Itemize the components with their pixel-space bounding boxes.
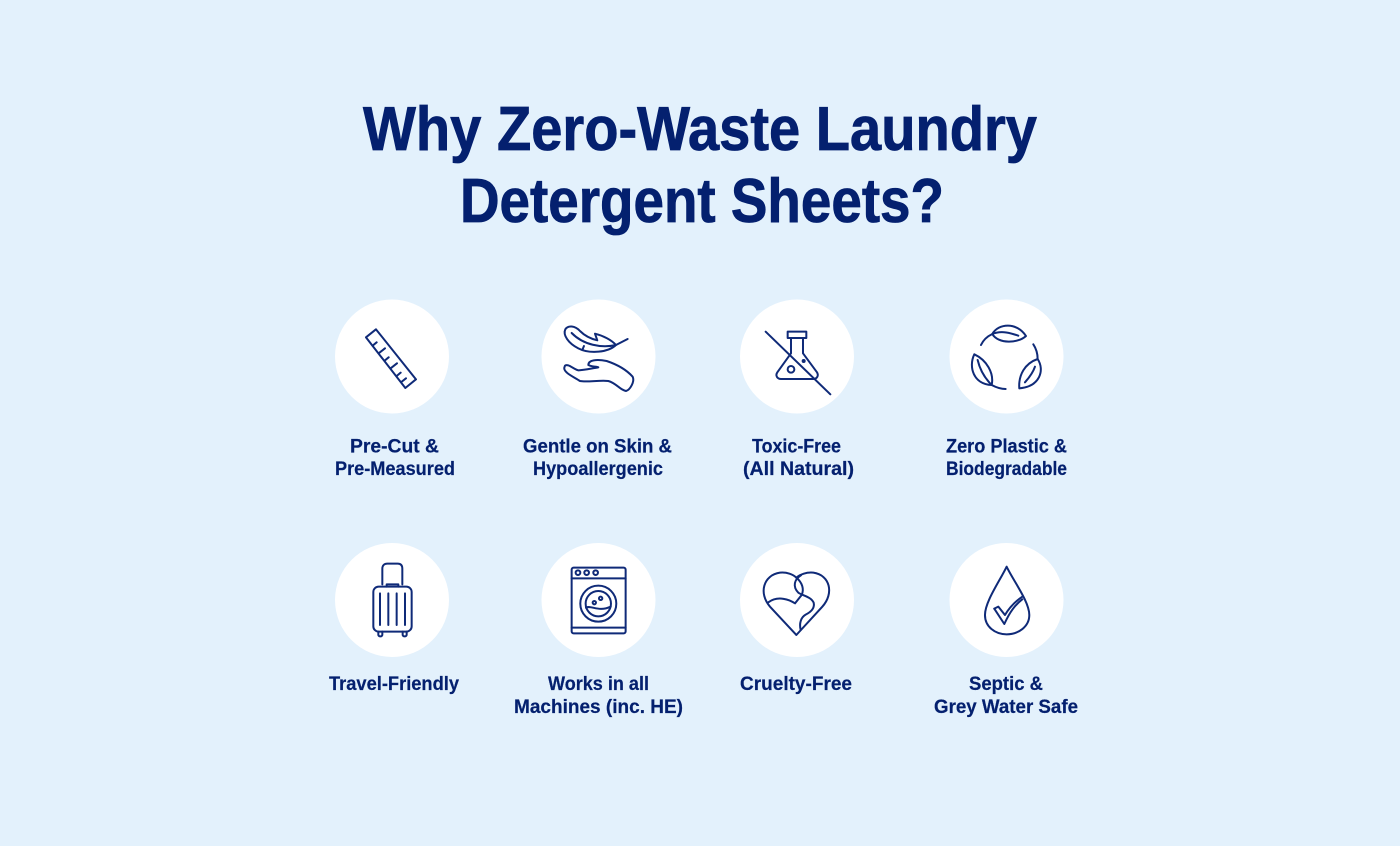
icon: suitcase — [373, 564, 412, 636]
item: toxic-free: (All Natural) — [743, 459, 854, 480]
icon: three leaves in a cycle — [972, 326, 1041, 389]
item: toxic-free — [740, 300, 854, 480]
item: septic and grey water safe — [934, 543, 1078, 718]
item: gentle on skin — [523, 300, 672, 480]
item: gentle on skin: Gentle on Skin & — [523, 436, 672, 458]
item: cruelty-free: Cruelty-Free — [740, 674, 852, 695]
item: pre-cut and pre-measured: Pre-Measured — [335, 459, 455, 480]
item: zero plastic: Zero Plastic & — [946, 436, 1067, 458]
item: pre-cut and pre-measured — [335, 300, 455, 480]
icon: heart globe — [764, 573, 829, 635]
item: travel-friendly: Travel-Friendly — [329, 674, 459, 695]
item: septic and grey water safe: Septic & — [969, 674, 1043, 695]
icon: crossed-out flask — [766, 332, 830, 394]
title: Why Zero-Waste Laundry — [363, 95, 1037, 164]
item: travel-friendly — [329, 543, 459, 695]
title: Detergent Sheets? — [460, 167, 944, 236]
title — [363, 95, 1037, 236]
item: septic and grey water safe: Grey Water Safe — [934, 697, 1078, 718]
icon: water drop with check — [985, 567, 1029, 634]
item: zero plastic — [946, 300, 1067, 480]
item: zero plastic: Biodegradable — [946, 459, 1067, 480]
item: works in all machines: Works in all — [548, 674, 649, 695]
item: gentle on skin: Hypoallergenic — [533, 459, 663, 480]
item: works in all machines — [514, 543, 683, 718]
icon: washing machine — [572, 568, 626, 633]
item: pre-cut and pre-measured: Pre-Cut & — [350, 436, 439, 458]
icon: feather over hand — [564, 326, 633, 391]
item: toxic-free: Toxic-Free — [752, 436, 841, 458]
item: cruelty-free — [740, 543, 854, 695]
icon: ruler — [366, 329, 416, 388]
item: works in all machines: Machines (inc. HE) — [514, 697, 683, 718]
